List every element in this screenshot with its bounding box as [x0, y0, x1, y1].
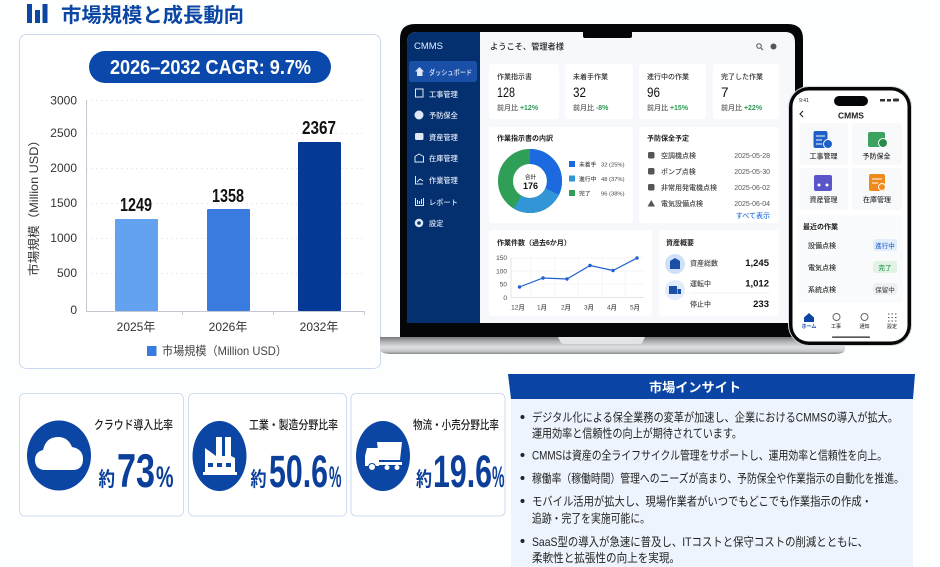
stat card: cloud adoption: 73 — [117, 444, 155, 497]
stat card: industry and manufacturing: % — [329, 461, 342, 494]
panel: work count line chart: 100 — [496, 268, 507, 276]
bar chart: 市場規模（Million USD） — [26, 134, 41, 276]
CAGR pill: 2026–2032 CAGR: 9.7% — [110, 57, 311, 79]
sidebar — [407, 32, 480, 323]
insight bullets: 柔軟性と拡張性の向上を実現。 — [532, 550, 680, 565]
panel: work count line chart: 4月 — [607, 304, 617, 312]
panel: preventive maintenance schedule: 空調機点検 — [661, 151, 696, 160]
chart legend: 市場規模（Million USD） — [162, 343, 287, 358]
stat card: cloud adoption — [20, 394, 184, 516]
panel: work order breakdown donut: 96 (38%) — [601, 192, 625, 198]
stat card: industry and manufacturing — [188, 394, 346, 516]
panel: work order breakdown donut — [489, 127, 633, 223]
phone panel: recent work: 保留中 — [875, 285, 895, 294]
phone panel: recent work: 最近の作業 — [803, 222, 838, 231]
KPI tile: completed — [713, 64, 779, 119]
insight bullets: モバイル活用が拡大し、現場作業者がいつでもどこでも作業指示の作成・ — [532, 494, 872, 508]
bar chart: 1358 — [212, 186, 244, 206]
panel: preventive maintenance schedule: 非常用発電機点検 — [661, 183, 717, 192]
panel: asset overview: 停止中 — [690, 300, 711, 308]
phone tile: preventive maintenance — [852, 123, 902, 165]
phone bottom navigation: 工事 — [831, 323, 841, 330]
phone panel: recent work — [797, 215, 903, 303]
sidebar: ダッシュボード — [429, 68, 472, 77]
title: market size and growth trend: 市場規模と成長動向 — [61, 3, 244, 27]
insight header — [508, 374, 915, 399]
panel: work order breakdown donut: 作業指示書の内訳 — [497, 134, 553, 142]
panel: work count line chart: 12月 — [511, 304, 525, 312]
dashboard header — [490, 42, 776, 52]
panel: work count line chart: 5月 — [630, 304, 640, 312]
laptop base — [380, 337, 845, 354]
sidebar: 工事管理 — [429, 90, 458, 99]
panel: preventive maintenance schedule: 2025-05-28 — [734, 153, 770, 160]
stat card: logistics and retail: 19.6 — [433, 446, 492, 497]
bar chart: 2000 — [50, 161, 77, 175]
icon: truck — [356, 421, 410, 491]
phone tile: asset management: 資産管理 — [810, 195, 838, 204]
panel: work order breakdown donut: 176 — [523, 181, 538, 191]
sidebar: レポート — [429, 198, 458, 207]
panel: preventive maintenance schedule: 電気設備点検 — [661, 199, 703, 208]
KPI tile: not started — [565, 64, 633, 119]
panel: work order breakdown donut: 完了 — [579, 190, 591, 198]
panel: preventive maintenance schedule: ポンプ点検 — [661, 167, 696, 176]
phone panel: recent work: 系統点検 — [808, 285, 836, 294]
phone status bar — [799, 96, 899, 106]
stat card: industry and manufacturing: 約 — [250, 468, 266, 491]
panel: preventive maintenance schedule: 予防保全予定 — [647, 134, 689, 142]
bar chart: 2026年 — [209, 320, 247, 334]
bar chart: 1500 — [50, 196, 77, 210]
bar chart: 1249 — [120, 195, 152, 215]
stat card: logistics and retail: 物流・小売分野比率 — [413, 417, 499, 432]
panel: work order breakdown donut: 未着手 — [579, 160, 597, 168]
phone bottom navigation: ホーム — [802, 323, 816, 330]
KPI tile: completed: 完了した作業 — [721, 72, 763, 81]
bar chart: 2367 — [302, 118, 336, 138]
phone tile: asset management — [799, 168, 848, 210]
bar chart: 2500 — [50, 126, 77, 140]
insight bullets: SaaS型の導入が急速に普及し、ITコストと保守コストの削減とともに、 — [532, 534, 868, 549]
phone header: CMMS — [838, 110, 864, 120]
stat card: logistics and retail — [351, 394, 505, 516]
panel: work count line chart: 0 — [503, 295, 507, 302]
text: % — [492, 461, 504, 494]
KPI tile: not started: 前月比 -8% — [573, 103, 609, 112]
panel: work order breakdown donut: 合計 — [525, 173, 536, 181]
panel: work count line chart: 作業件数（過去6か月） — [497, 238, 571, 247]
laptop mockup — [380, 24, 845, 354]
bar chart: 500 — [57, 266, 77, 280]
phone bottom navigation — [802, 313, 897, 338]
bar chart: 2032年 — [300, 320, 338, 334]
panel: work count line chart: 150 — [496, 255, 507, 262]
CAGR pill — [89, 51, 331, 83]
laptop bezel — [400, 24, 803, 337]
dashboard header: ようこそ、管理者様 — [490, 42, 565, 52]
KPI tile: in progress — [639, 64, 706, 119]
KPI tile: work orders: 前月比 +12% — [497, 103, 539, 112]
panel: preventive maintenance schedule: すべて表示 — [736, 211, 770, 220]
phone tile: construction management: 工事管理 — [810, 152, 838, 160]
icon: cloud — [27, 420, 91, 490]
sidebar: CMMS — [414, 41, 443, 52]
KPI tile: completed: 前月比 +22% — [721, 103, 763, 112]
laptop screen — [407, 32, 795, 323]
panel: preventive maintenance schedule: 2025-06-02 — [734, 185, 770, 192]
panel: work order breakdown donut: 48 (37%) — [601, 177, 625, 183]
panel: work count line chart — [489, 230, 652, 316]
phone screen — [792, 90, 908, 342]
stat card: industry and manufacturing: 工業・製造分野比率 — [249, 417, 338, 432]
panel: asset overview: 資産概要 — [666, 238, 694, 247]
bar chart — [26, 94, 365, 334]
insight bullets: 追跡・完了を実施可能に。 — [532, 510, 650, 526]
bar chart: 2025年 — [117, 320, 155, 334]
phone bottom navigation: 通知 — [859, 323, 870, 330]
panel: asset overview: 1,245 — [745, 258, 770, 269]
panel: asset overview: 1,012 — [745, 278, 769, 290]
panel: asset overview: 233 — [753, 299, 769, 310]
phone body — [788, 86, 912, 346]
stat card: logistics and retail: 約 — [416, 468, 432, 491]
phone mockup — [788, 86, 912, 346]
panel: work order breakdown donut: 進行中 — [579, 175, 597, 183]
phone tile: inventory management — [852, 168, 902, 210]
panel: preventive maintenance schedule: 2025-05-30 — [734, 169, 770, 176]
panel: market insight — [508, 374, 915, 567]
insight bullets: 運用効率と信頼性の向上が期待されています。 — [532, 426, 742, 440]
KPI tile: in progress: 前月比 +15% — [647, 103, 689, 112]
sidebar: 資産管理 — [429, 133, 458, 142]
phone tile: construction management — [799, 123, 848, 165]
phone panel: recent work: 進行中 — [875, 241, 895, 250]
phone header — [800, 110, 864, 120]
panel: asset overview: 資産総数 — [690, 258, 718, 268]
panel: work count line chart: 2月 — [561, 304, 571, 312]
panel: asset overview — [659, 230, 779, 316]
panel: preventive maintenance schedule — [639, 127, 779, 223]
sidebar: 在庫管理 — [429, 154, 458, 163]
phone tile: preventive maintenance: 予防保全 — [862, 152, 890, 160]
phone panel: recent work: 完了 — [878, 264, 892, 272]
KPI tile: not started: 未着手作業 — [573, 72, 608, 81]
stat card: cloud adoption: 約 — [98, 468, 115, 491]
KPI tile: work orders — [489, 64, 559, 119]
panel: market size chart — [20, 34, 380, 368]
insight bullets — [520, 410, 904, 565]
phone bottom navigation: 設定 — [887, 323, 897, 330]
panel: work count line chart: 50 — [500, 282, 507, 288]
phone tile: inventory management: 在庫管理 — [863, 195, 891, 204]
panel: asset overview: 運転中 — [690, 279, 711, 288]
KPI tile: in progress: 96 — [647, 85, 660, 100]
bar chart: 3000 — [50, 94, 77, 108]
insight header: 市場インサイト — [649, 380, 741, 395]
KPI tile: completed: 7 — [721, 85, 729, 100]
KPI tile: work orders: 128 — [497, 85, 515, 100]
panel: preventive maintenance schedule: 2025-06-04 — [734, 201, 770, 208]
panel: work count line chart: 3月 — [584, 304, 594, 312]
bar chart: 1000 — [50, 231, 77, 245]
camera notch — [583, 32, 632, 38]
stat card: cloud adoption: クラウド導入比率 — [94, 417, 173, 432]
phone panel: recent work: 設備点検 — [808, 241, 836, 250]
sidebar: 予防保全 — [429, 111, 458, 120]
panel: work order breakdown donut: 32 (25%) — [601, 162, 625, 168]
stat card: industry and manufacturing: 50.6 — [269, 446, 328, 497]
sidebar: 設定 — [429, 219, 443, 228]
KPI tile: not started: 32 — [573, 85, 586, 100]
bar chart: 0 — [70, 303, 77, 317]
phone panel: recent work: 電気点検 — [808, 263, 836, 272]
KPI tile: in progress: 進行中の作業 — [647, 72, 689, 81]
icon: factory — [192, 421, 246, 491]
stat card: cloud adoption: % — [156, 461, 174, 494]
sidebar: 作業管理 — [429, 176, 458, 185]
phone status bar: 9:41 — [799, 98, 809, 104]
panel: work count line chart: 1月 — [537, 304, 547, 312]
KPI tile: work orders: 作業指示書 — [497, 72, 532, 81]
